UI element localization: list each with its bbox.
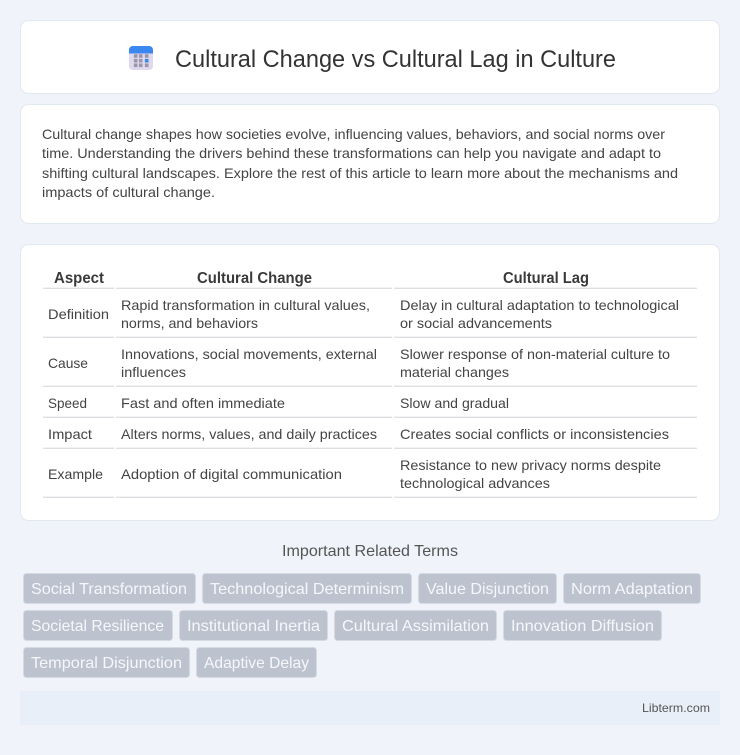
row: cause: influences (121, 364, 186, 380)
table header row (54, 270, 589, 287)
tags: related terms: Institutional Inertia (187, 618, 320, 635)
table header row: Cultural Change (197, 270, 312, 287)
row: cause: Innovations, social movements, external (121, 346, 377, 362)
row: definition: or social advancements (400, 315, 552, 331)
intro text: time. Understanding the drivers behind these transformations can help you navigate and adapt to (42, 145, 661, 161)
tags: related terms: Cultural Assimilation (342, 618, 489, 635)
row: speed: Fast and often immediate (121, 395, 285, 411)
row: impact: Impact (48, 426, 92, 442)
row: speed: Slow and gradual (400, 395, 509, 411)
intro text: shifting cultural landscapes. Explore the rest of this article to learn more about the mechanisms and (42, 165, 678, 181)
tags: related terms (24, 574, 700, 678)
row: example: Resistance to new privacy norms despite (400, 457, 661, 473)
row: example: Adoption of digital communication (121, 466, 342, 482)
row: cause: Slower response of non-material culture to (400, 346, 670, 362)
row: example (48, 457, 661, 491)
table header row: Aspect (54, 270, 105, 287)
row: definition: Delay in cultural adaptation to technological (400, 297, 679, 313)
intro text: Cultural change shapes how societies evolve, influencing values, behaviors, and social norms over (42, 126, 665, 142)
icon: calendar (129, 46, 153, 70)
tags: related terms: Social Transformation (31, 581, 187, 598)
tags: related terms: Value Disjunction (426, 581, 549, 598)
tags: related terms: Temporal Disjunction (31, 655, 182, 672)
row: speed: Speed (48, 395, 87, 411)
row: impact: Creates social conflicts or inconsistencies (400, 426, 669, 442)
row: definition: Rapid transformation in cultural values, (121, 297, 370, 313)
row: cause: Cause (48, 355, 88, 371)
row: speed (48, 395, 509, 411)
heading: important related terms: Important Related Terms (282, 543, 458, 560)
panel: introduction (20, 104, 720, 224)
tags: related terms: Norm Adaptation (571, 581, 693, 598)
title: Cultural Change vs Cultural Lag in Culture (175, 46, 616, 73)
row: example: Example (48, 466, 103, 482)
row: cause (48, 346, 670, 380)
row: impact (48, 426, 669, 442)
row: cause: material changes (400, 364, 509, 380)
footer: Libterm.com (642, 701, 710, 715)
tags: related terms: Innovation Diffusion (511, 618, 654, 635)
intro text: impacts of cultural change. (42, 184, 215, 200)
row: example: technological advances (400, 475, 550, 491)
intro text (42, 126, 678, 200)
panel: header (20, 20, 720, 94)
panel: comparison table (20, 244, 720, 520)
row: definition (48, 297, 679, 331)
row: definition: norms, and behaviors (121, 315, 258, 331)
row: definition: Definition (48, 306, 109, 322)
row: impact: Alters norms, values, and daily practices (121, 426, 377, 442)
footer (20, 691, 720, 725)
tags: related terms: Societal Resilience (31, 618, 164, 635)
tags: related terms: Adaptive Delay (204, 655, 309, 672)
tags: related terms: Technological Determinism (210, 581, 404, 598)
table header row: Cultural Lag (503, 270, 589, 287)
